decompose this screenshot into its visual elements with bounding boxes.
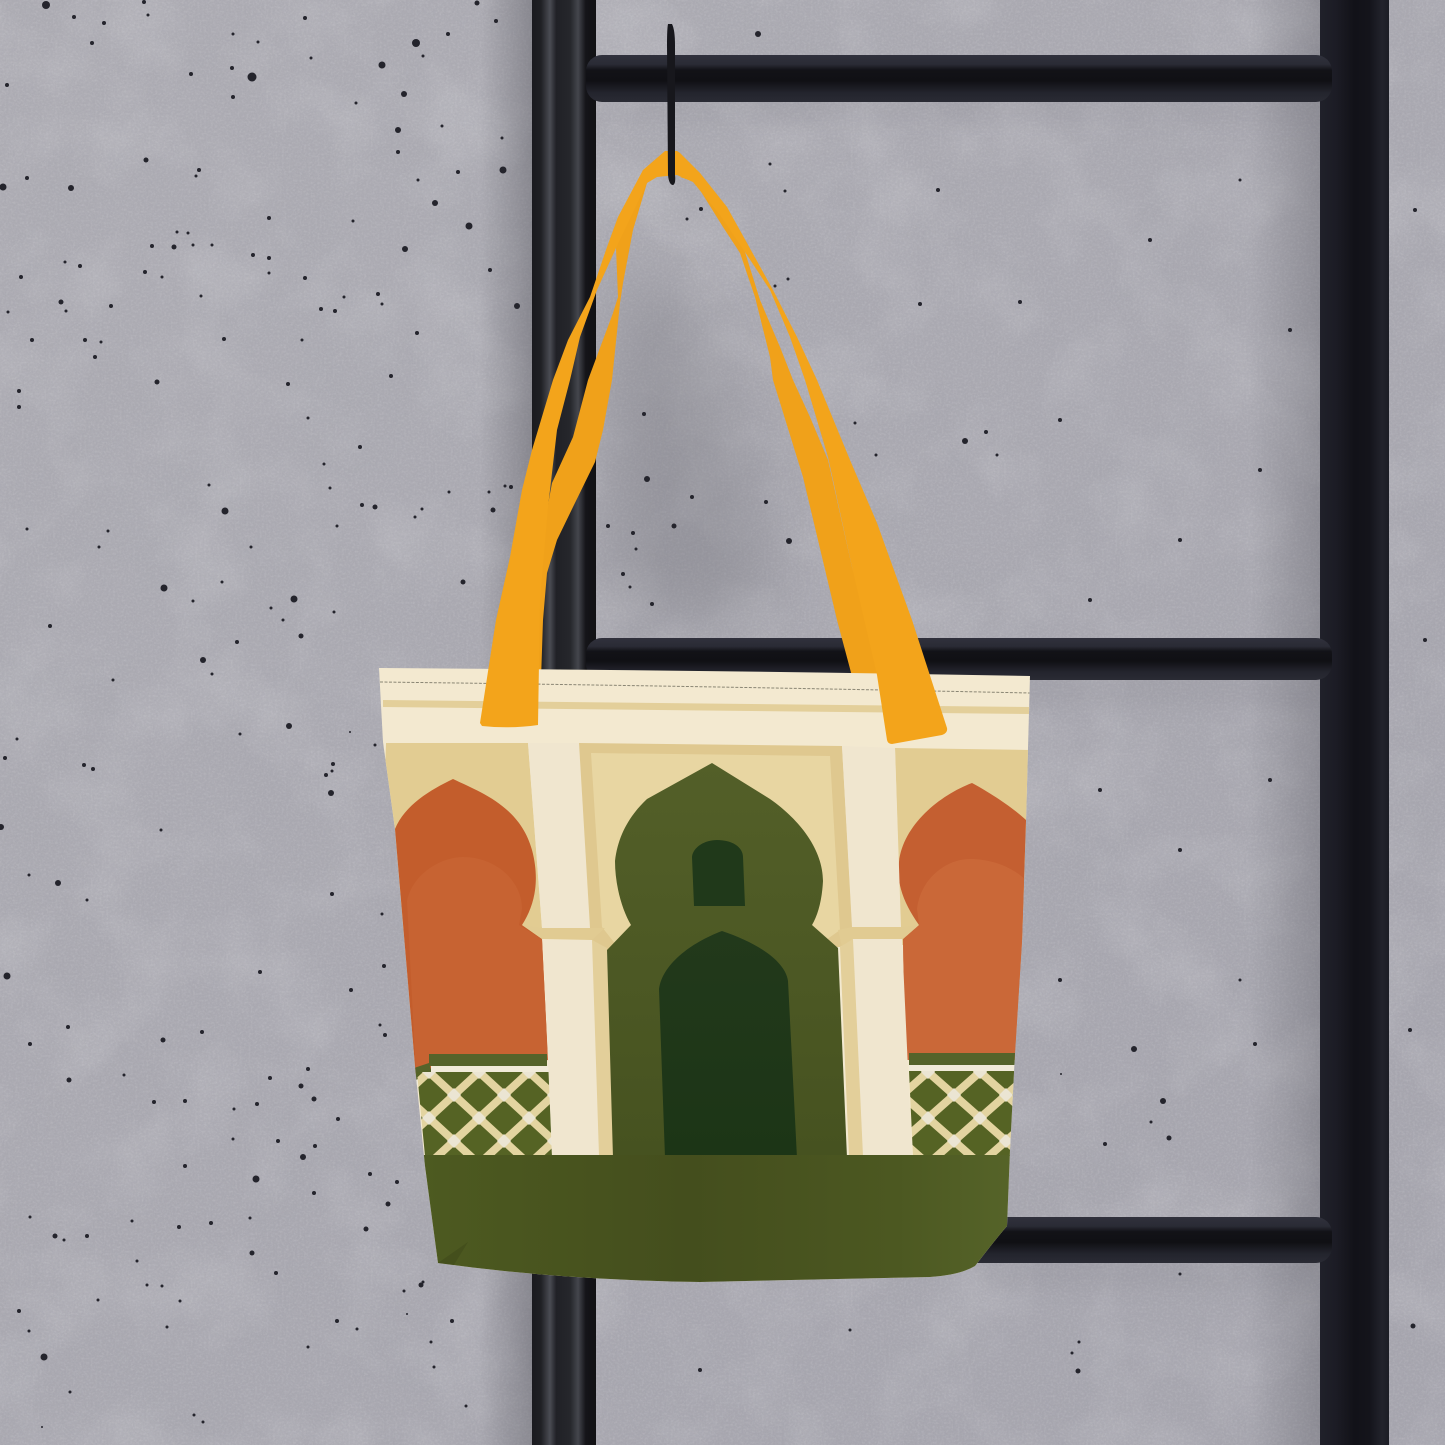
small dark window	[692, 840, 745, 906]
right lower pillar	[853, 939, 912, 1156]
left orange arch inner	[540, 938, 548, 1060]
canvas base cream	[370, 660, 1040, 1290]
ladder left rail	[532, 0, 596, 1445]
front handle right	[677, 151, 947, 744]
left orange arch	[380, 779, 548, 1075]
ladder and bag shadows on wall	[480, 0, 1320, 1445]
tan band	[383, 700, 1030, 714]
back handle left	[520, 183, 647, 680]
green base band	[420, 1155, 1015, 1290]
left lower pillar	[546, 1020, 552, 1155]
right upper pillar	[842, 746, 901, 927]
left lower pillar strip	[592, 940, 614, 1156]
ladder rung middle	[586, 638, 1332, 680]
left upper pillar	[528, 744, 542, 927]
right balustrade	[909, 1053, 1015, 1156]
ladder	[532, 0, 1389, 1445]
centre frame	[579, 743, 853, 950]
right wall panel	[895, 748, 1030, 945]
ladder rung bottom	[586, 1217, 1332, 1263]
left wall panel	[380, 743, 542, 939]
tote bag body	[370, 660, 1040, 1290]
stitching	[380, 682, 1030, 693]
right orange arch inner	[903, 859, 1030, 1060]
ladder rung top	[586, 55, 1332, 102]
green central arch	[607, 763, 847, 1158]
corner fold	[438, 1242, 468, 1268]
right lower pillar strip	[840, 939, 863, 1156]
back handle right	[680, 173, 885, 680]
left balustrade	[414, 1054, 552, 1156]
centre panel	[591, 753, 840, 950]
right capital	[838, 925, 919, 947]
right orange arch	[898, 783, 1030, 1060]
front handle left	[480, 151, 690, 727]
hook	[667, 24, 675, 185]
left capital	[522, 925, 605, 940]
large dark door	[659, 931, 797, 1158]
ladder right rail	[1320, 0, 1389, 1445]
